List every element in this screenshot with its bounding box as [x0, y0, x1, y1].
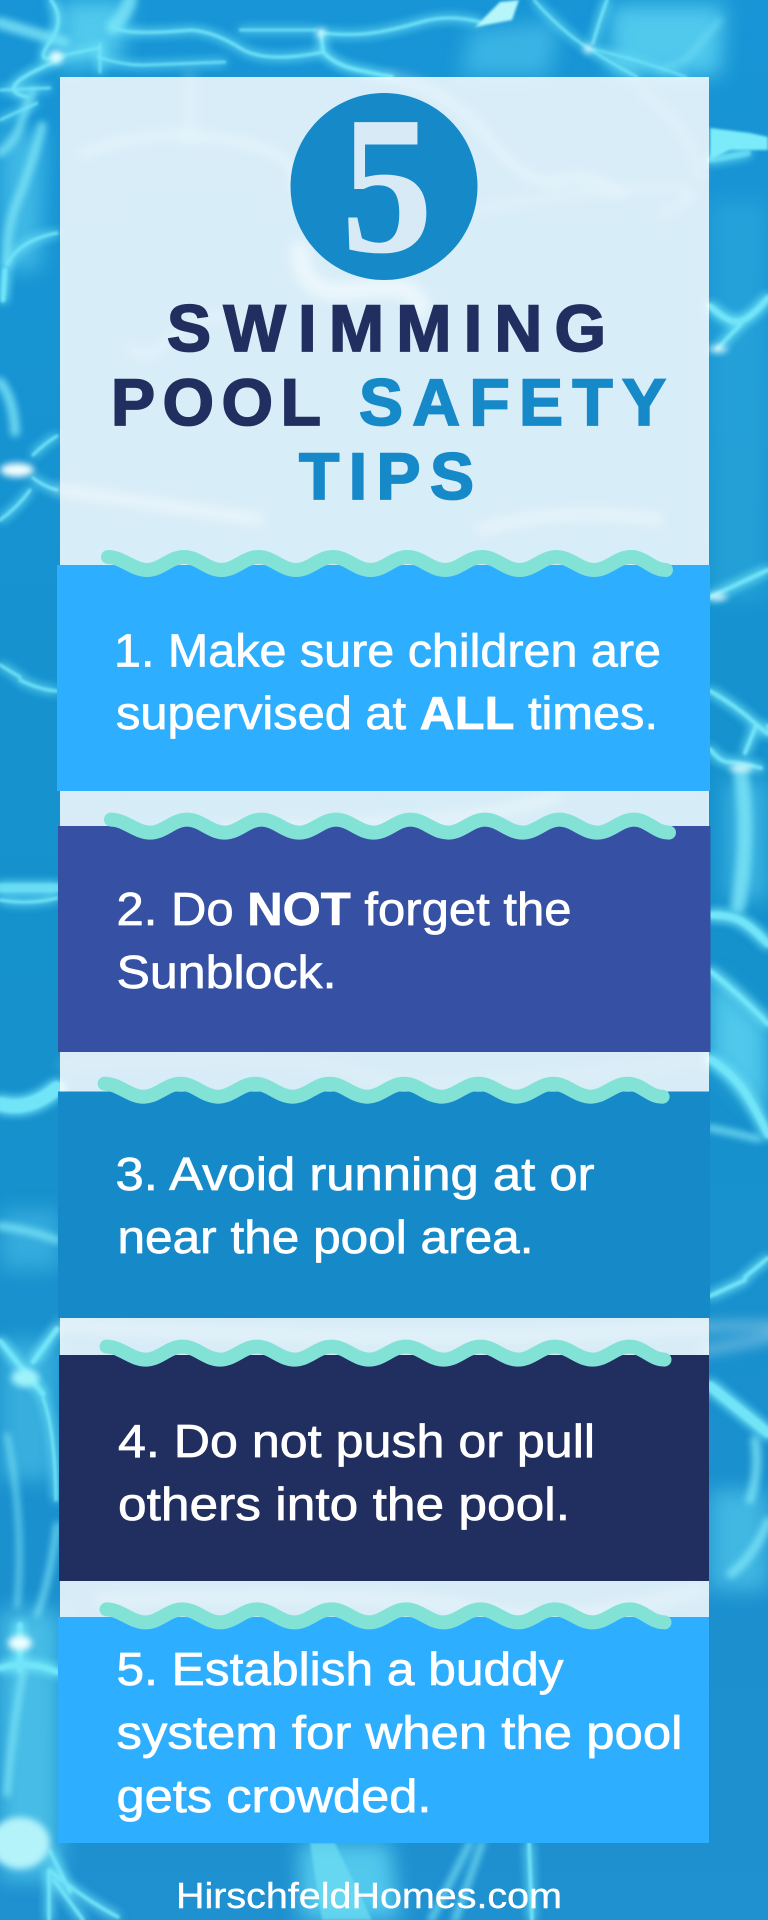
panel: tip 5	[58, 1617, 709, 1843]
text: tip 1	[114, 624, 661, 739]
text: tip 5: 5. Establish a buddy	[116, 1643, 564, 1695]
title: SAFETY	[359, 365, 666, 439]
title: SWIMMING	[167, 291, 606, 365]
text: tip 5: gets crowded.	[116, 1770, 432, 1822]
text: tip 2: 2. Do NOT forget the	[116, 883, 572, 935]
panel: translucent white backing	[60, 77, 709, 1617]
text: tip 3: 3. Avoid running at or	[116, 1148, 594, 1200]
text: tip 3	[116, 1148, 594, 1263]
icon: wave 4	[106, 1347, 664, 1360]
text: tip 4: others into the pool.	[118, 1478, 570, 1530]
text: tip 2	[116, 883, 572, 998]
panel: tip 1	[57, 565, 710, 791]
icon: wave 2	[111, 820, 669, 833]
text: tip 5: system for when the pool	[116, 1706, 682, 1758]
icon: number 5 badge: 5	[341, 76, 433, 293]
text: tip 2: Sunblock.	[116, 946, 336, 998]
footer: website: HirschfeldHomes.com	[176, 1875, 562, 1916]
text: tip 1: supervised at ALL times.	[116, 687, 658, 739]
panel: tip 2	[58, 826, 710, 1052]
panel: tip 3	[58, 1092, 710, 1318]
icon: wave 1	[108, 557, 666, 570]
text: tip 1: 1. Make sure children are	[114, 624, 661, 676]
icon: number 5 badge	[290, 76, 478, 293]
text: tip 4: 4. Do not push or pull	[118, 1415, 595, 1467]
panel: tip 4	[59, 1355, 709, 1581]
title: POOL	[111, 365, 321, 439]
text: tip 4	[118, 1415, 595, 1530]
title: TIPS	[299, 439, 474, 513]
text: tip 3: near the pool area.	[118, 1211, 534, 1263]
icon: wave 3	[105, 1084, 663, 1097]
icon: wave 5	[106, 1609, 664, 1622]
title	[111, 291, 666, 513]
text: tip 5	[116, 1643, 682, 1822]
